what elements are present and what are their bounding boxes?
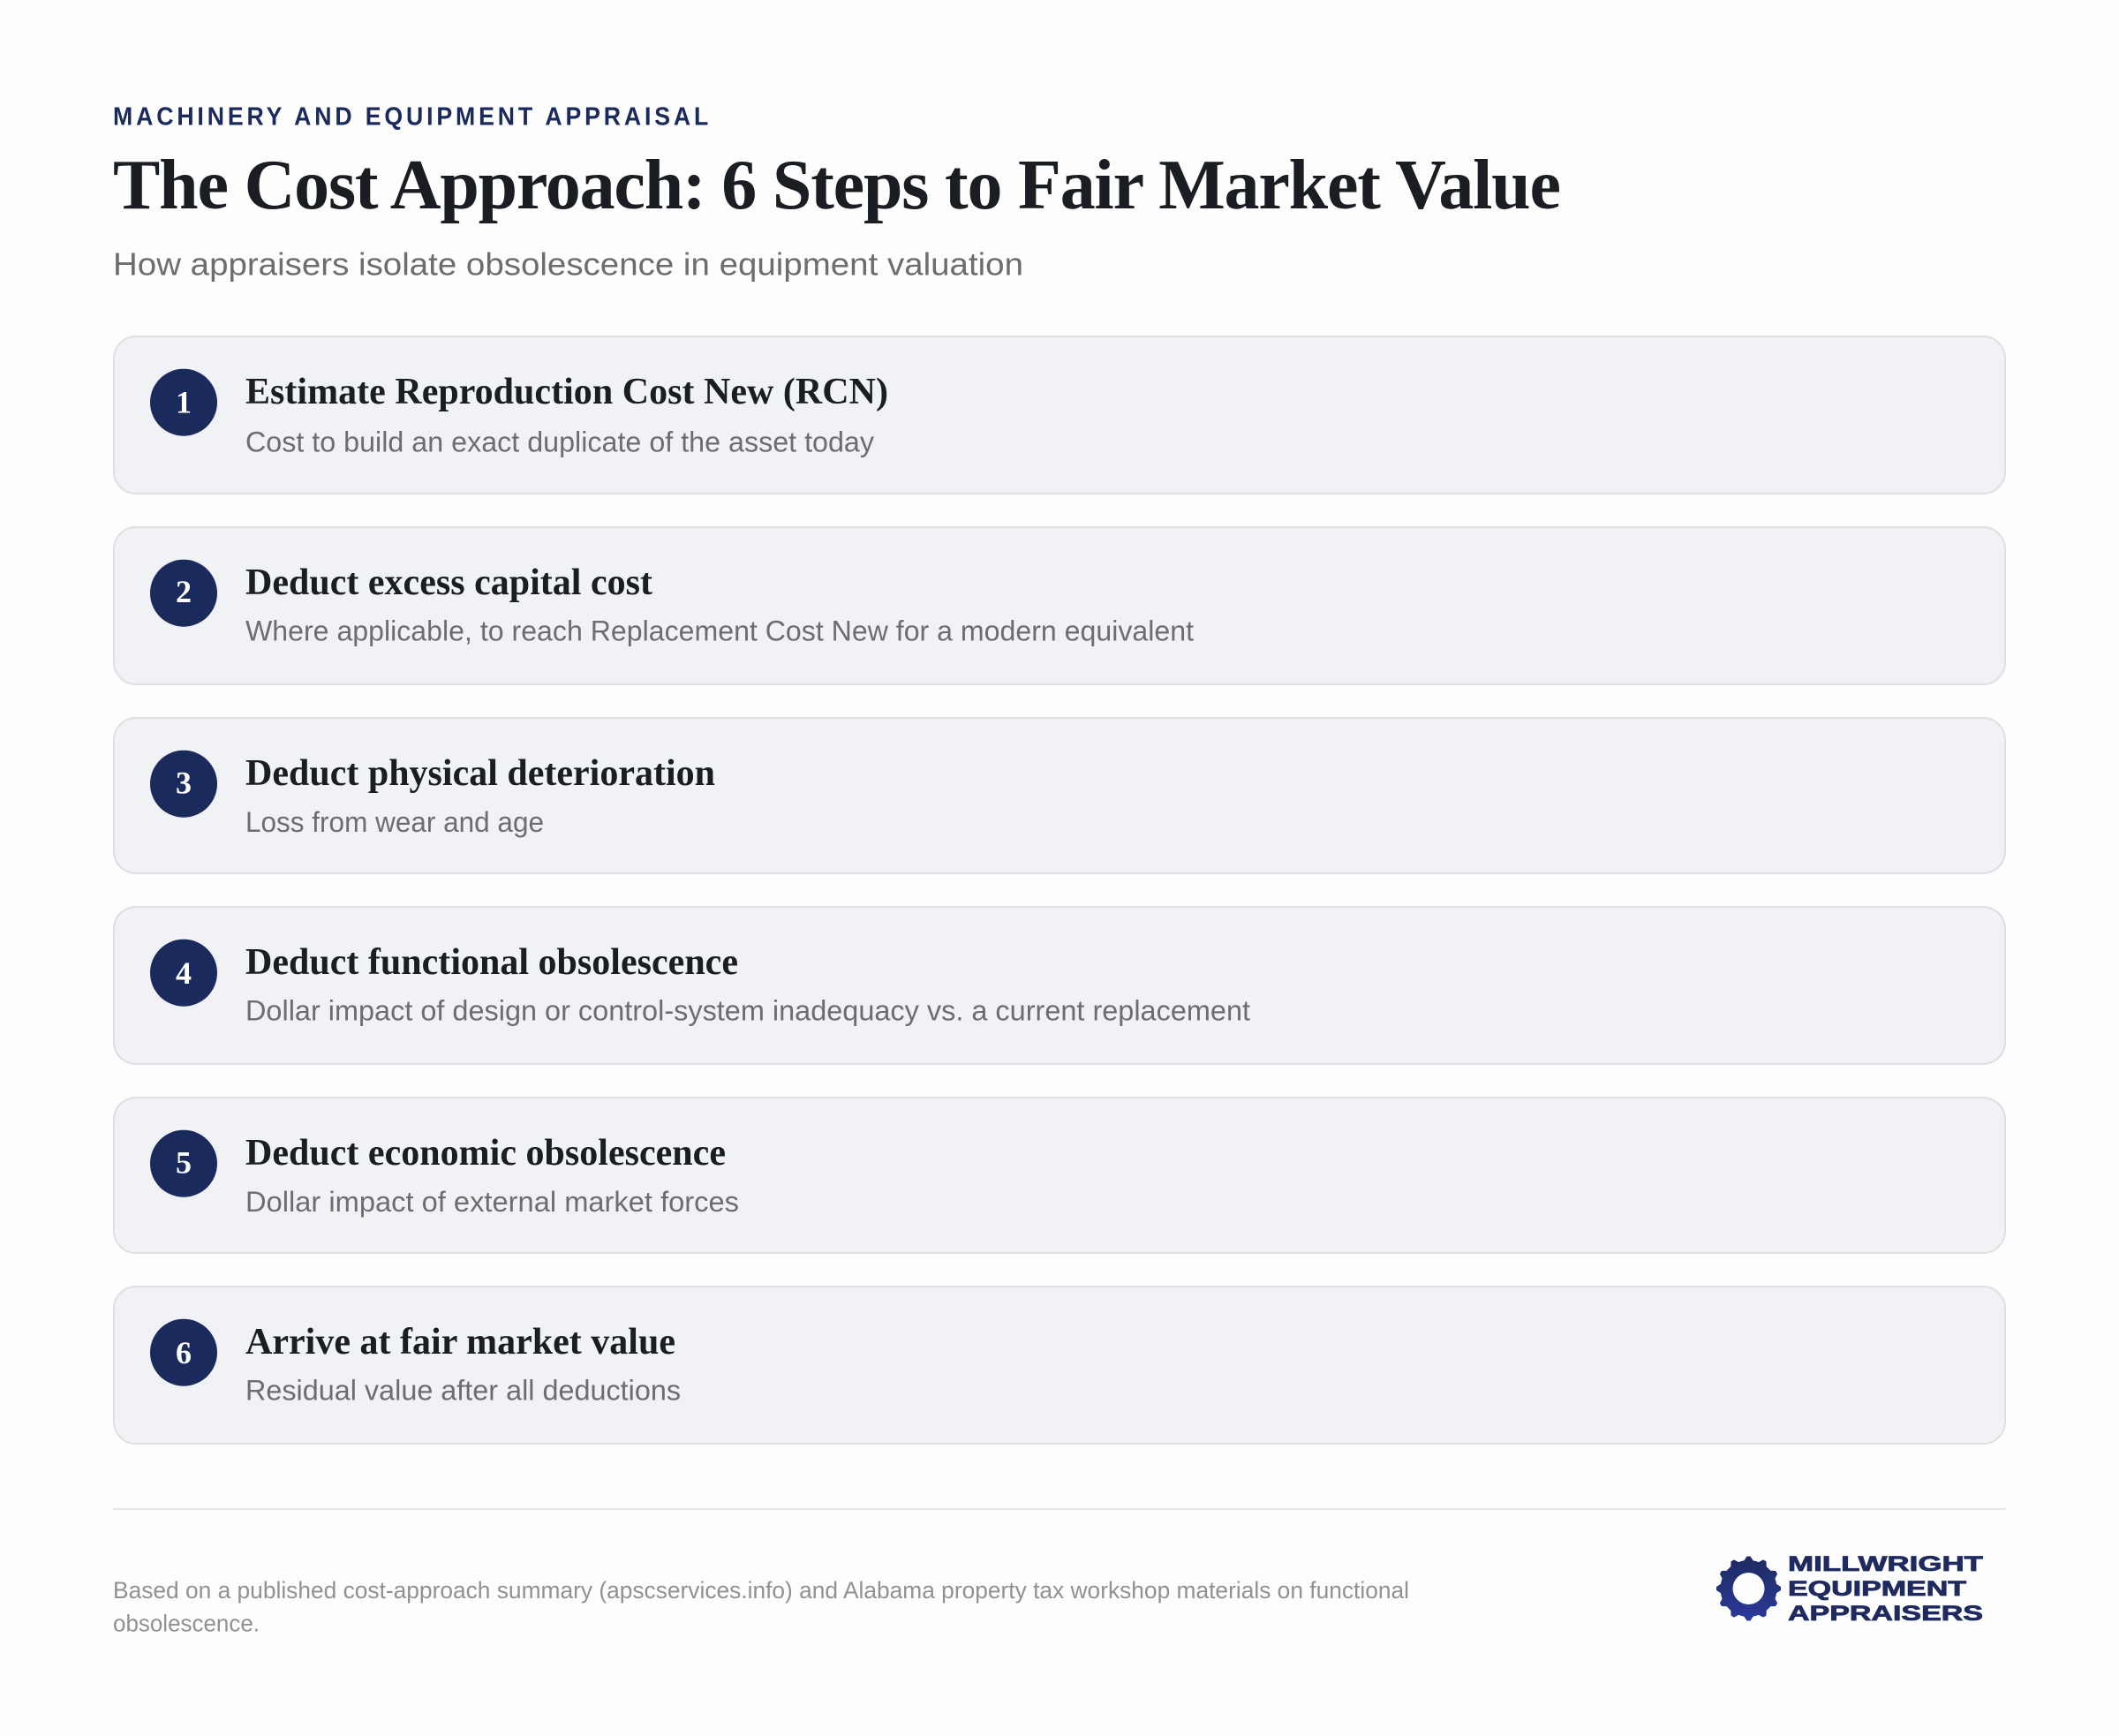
subtitle: How appraisers isolate obsolescence in equipment valuation [113, 245, 1023, 283]
step 1 number badge [150, 369, 217, 436]
step 1 number badge: 1 [176, 385, 192, 420]
step 5 number badge: 5 [176, 1144, 192, 1180]
step 6 number badge: 6 [176, 1335, 192, 1370]
step 2 number badge [150, 560, 217, 627]
logo wordmark: APPRAISERS [1788, 1602, 1983, 1626]
eyebrow: MACHINERY AND EQUIPMENT APPRAISAL [113, 102, 708, 131]
step 6 card [114, 1287, 2005, 1444]
step 1 card [114, 336, 2005, 494]
step 4 description: Dollar impact of design or control-system inadequacy vs. a current replacement [245, 994, 1250, 1026]
step 1 heading: Estimate Reproduction Cost New (RCN) [245, 372, 888, 412]
step 2 description: Where applicable, to reach Replacement Cost New for a modern equivalent [245, 615, 1194, 646]
step 4 number badge: 4 [176, 955, 192, 991]
footer source note [113, 1577, 1409, 1637]
step 6 number badge [150, 1319, 217, 1386]
step 2 number badge: 2 [176, 574, 192, 609]
logo wordmark: EQUIPMENT [1788, 1577, 1966, 1601]
footer source note: Based on a published cost-approach summary (apscservices.info) and Alabama property tax workshop materials on functional [113, 1577, 1409, 1604]
step 5 number badge [150, 1130, 217, 1197]
step 6 description: Residual value after all deductions [245, 1374, 681, 1406]
step 1 description: Cost to build an exact duplicate of the asset today [245, 426, 874, 457]
title: The Cost Approach: 6 Steps to Fair Market Value [113, 147, 1561, 224]
step 4 heading: Deduct functional obsolescence [245, 942, 738, 983]
icon: gear [1716, 1556, 1781, 1621]
step 5 card [114, 1098, 2005, 1253]
logo wordmark: MILLWRIGHT [1788, 1552, 1983, 1576]
step 3 heading: Deduct physical deterioration [245, 753, 715, 794]
step 5 heading: Deduct economic obsolescence [245, 1133, 726, 1174]
logo wordmark [1788, 1552, 1983, 1626]
step 2 heading: Deduct excess capital cost [245, 562, 652, 603]
step 3 number badge [150, 751, 217, 818]
step 3 card [114, 718, 2005, 873]
step 5 description: Dollar impact of external market forces [245, 1186, 739, 1218]
step 3 description: Loss from wear and age [245, 806, 544, 838]
step 2 card [114, 527, 2005, 684]
footer source note: obsolescence. [113, 1611, 260, 1637]
step 4 number badge [150, 940, 217, 1007]
logo: Millwright Equipment Appraisers [1716, 1556, 1983, 1621]
step 3 number badge: 3 [176, 765, 192, 800]
step 6 heading: Arrive at fair market value [245, 1322, 675, 1362]
step 4 card [114, 907, 2005, 1064]
